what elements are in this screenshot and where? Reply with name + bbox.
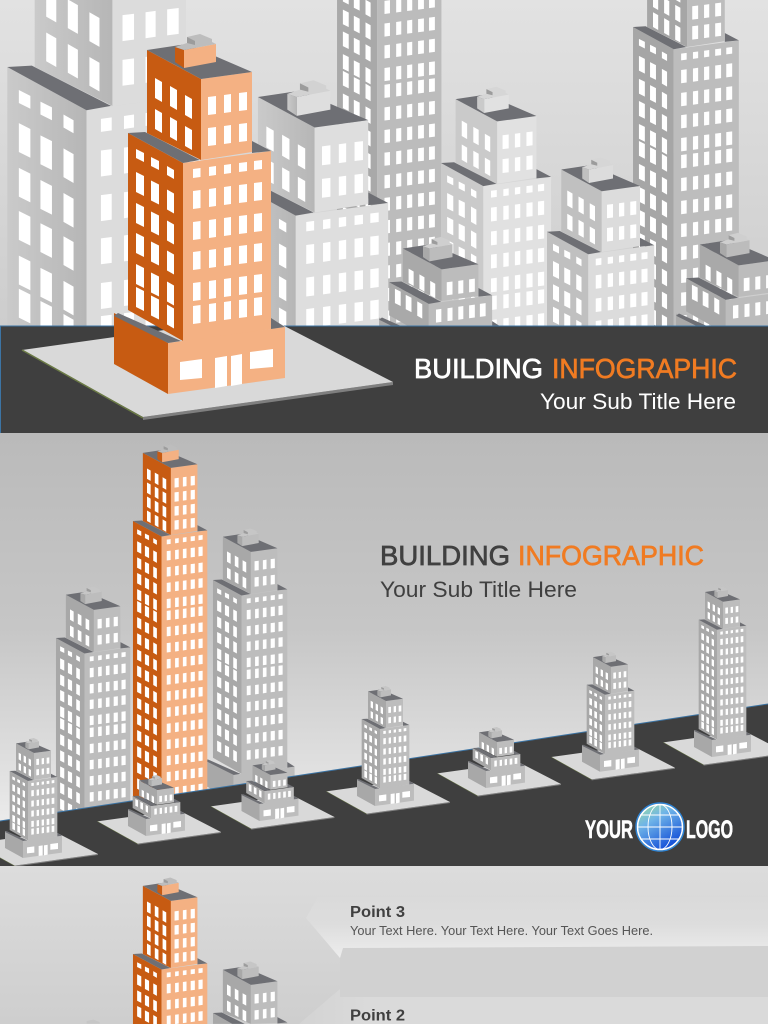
text: point 3: Point 3 bbox=[350, 904, 405, 921]
panel: growing buildings on road bbox=[0, 433, 768, 867]
building: small tower far left bbox=[0, 738, 98, 867]
building: back tower center bbox=[337, 0, 442, 326]
title: BUILDING bbox=[380, 540, 510, 571]
building: short block two bbox=[211, 760, 334, 830]
subtitle: Your Sub Title Here bbox=[380, 577, 577, 602]
arrow banner: point 2 bbox=[299, 989, 768, 1024]
road bbox=[0, 704, 768, 866]
building: short block three bbox=[437, 727, 561, 797]
platform under orange building bbox=[22, 316, 393, 420]
group: tall buildings with orange tower bbox=[56, 446, 294, 812]
building: large left tower bbox=[7, 0, 200, 326]
building: orange tower cropped at bottom edge bbox=[133, 878, 207, 1024]
text: point 3 bbox=[350, 904, 653, 938]
text: point 2: Point 2 bbox=[350, 1008, 405, 1024]
building: tower behind orange bbox=[258, 80, 388, 326]
building: gray tower tip at bottom edge bbox=[80, 1019, 100, 1024]
subtitle: Your Sub Title Here bbox=[540, 389, 736, 414]
building: right tower bbox=[547, 160, 654, 326]
building: short stepped right bbox=[676, 233, 768, 326]
title: INFOGRAPHIC bbox=[552, 353, 737, 384]
title: INFOGRAPHIC bbox=[518, 540, 704, 571]
panel: city skyline cover bbox=[0, 0, 768, 433]
title bbox=[382, 545, 704, 566]
logo: YOUR bbox=[585, 816, 633, 844]
logo: LOGO bbox=[686, 816, 733, 844]
building: orange hero bbox=[114, 34, 285, 394]
building: gray tower cropped at bottom edge bbox=[213, 961, 287, 1024]
building: center right tower bbox=[441, 89, 551, 326]
background: light gray sky bbox=[0, 0, 768, 326]
dark ground band bbox=[0, 326, 768, 433]
building: short block one bbox=[97, 775, 221, 845]
building: tall tower right bbox=[663, 587, 768, 766]
building: short stepped center bbox=[379, 237, 499, 326]
background: light gray bbox=[0, 866, 768, 1024]
text: point 3: Your Text Here. Your Text Here. Your Text Goes Here. bbox=[350, 924, 653, 938]
logo bbox=[585, 803, 733, 851]
band between points bbox=[340, 946, 768, 997]
title: BUILDING bbox=[414, 353, 543, 384]
arrow banner: point 3 bbox=[306, 897, 768, 958]
title bbox=[416, 358, 736, 379]
panel: points list bbox=[0, 866, 768, 1024]
building: medium tower two bbox=[551, 652, 675, 780]
building: medium tower one bbox=[326, 686, 450, 815]
building: back tower right bbox=[633, 0, 739, 326]
background: gradient sky bbox=[0, 433, 768, 820]
